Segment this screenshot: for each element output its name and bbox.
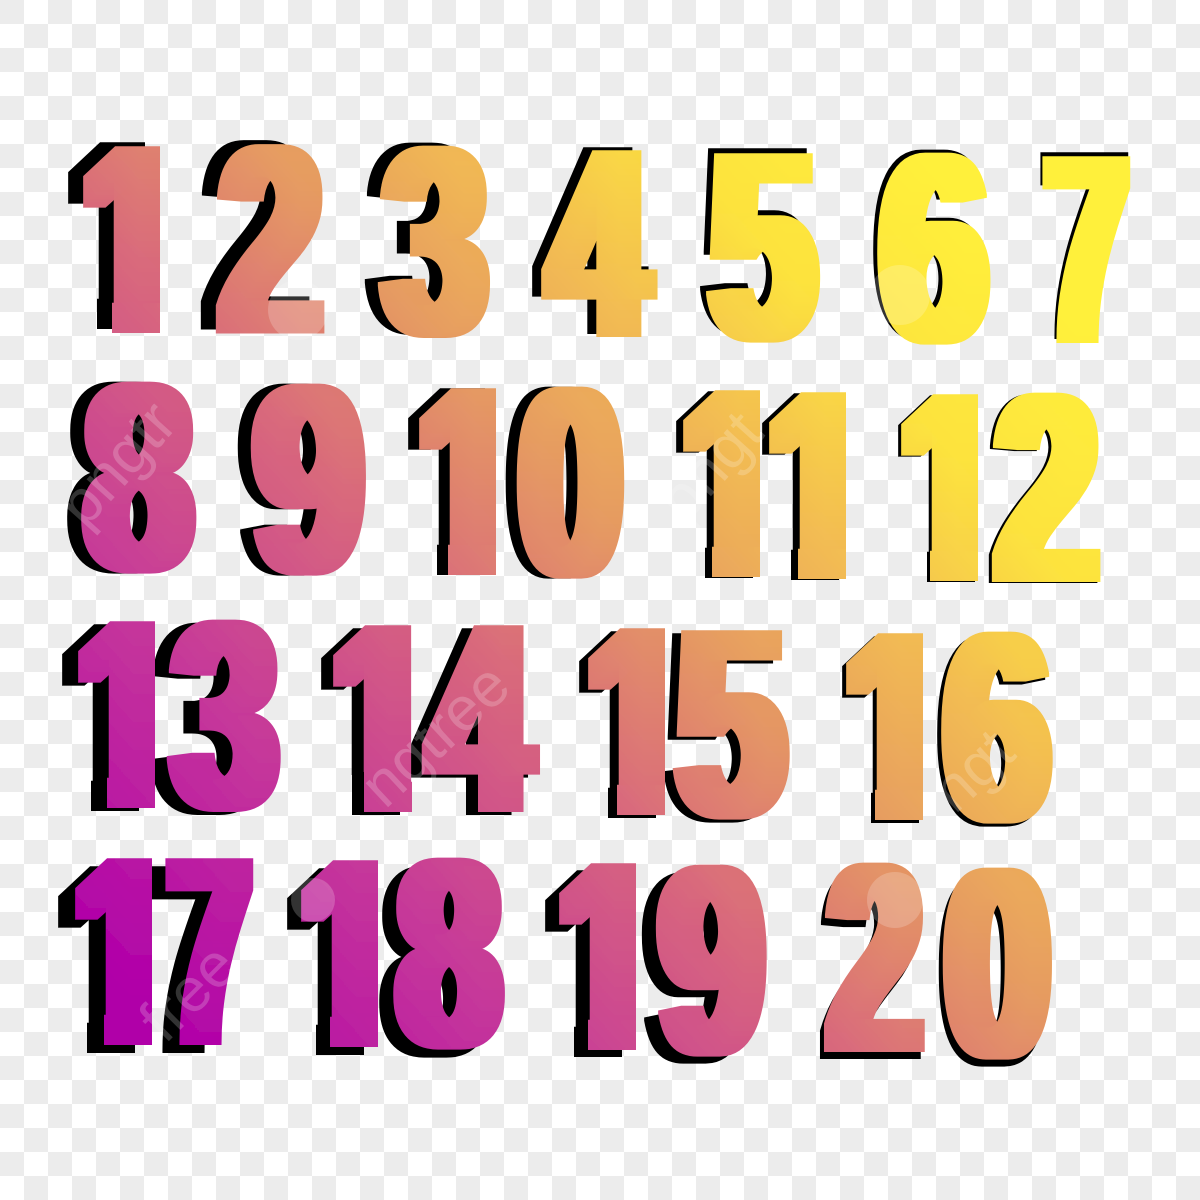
number 2: 2 xyxy=(221,90,321,389)
number 11: 1 xyxy=(682,334,784,632)
number 13: 1 xyxy=(76,564,180,864)
number 15: 5 xyxy=(678,574,784,872)
number 3: 3 xyxy=(385,92,486,390)
number 20: 0 xyxy=(942,820,1044,1120)
number 18: 1 xyxy=(300,804,402,1102)
number 7: 7 xyxy=(1045,96,1123,394)
number 11: 1 xyxy=(760,336,864,636)
number 14: 4 xyxy=(430,568,531,868)
number 12: 2 xyxy=(997,338,1097,638)
number 5: 5 xyxy=(711,96,814,396)
number 20: 2 xyxy=(825,816,916,1114)
number 19: 9 xyxy=(646,818,748,1116)
number 4: 4 xyxy=(540,90,640,390)
number 20 xyxy=(825,808,1048,1120)
number 15: 1 xyxy=(578,574,680,874)
watermark: free xyxy=(126,931,250,1055)
number 7 xyxy=(1045,96,1125,398)
watermark: ngt xyxy=(917,716,1028,825)
number 12 xyxy=(898,392,1100,583)
number 20: 0 xyxy=(946,814,1048,1112)
number 19: 1 xyxy=(558,806,660,1106)
watermark: pngt xyxy=(644,399,776,534)
number 14 xyxy=(321,625,540,815)
number 16: 1 xyxy=(844,576,948,876)
number 7: 7 xyxy=(1047,100,1125,398)
number 11 xyxy=(676,390,846,580)
number 19 xyxy=(545,863,767,1064)
watermark: pngtr xyxy=(44,388,190,539)
number 8: 8 xyxy=(72,328,177,626)
number 19: 1 xyxy=(544,814,646,1112)
number 16: 1 xyxy=(840,580,944,878)
number 14: 4 xyxy=(418,572,519,870)
number 10: 1 xyxy=(418,332,520,630)
number 10: 0 xyxy=(521,332,621,632)
watermark xyxy=(44,265,1028,1055)
number 1: 1 xyxy=(82,90,184,388)
number 17: 1 xyxy=(56,810,160,1108)
number 13: 3 xyxy=(157,568,260,868)
number 5: 5 xyxy=(705,92,808,390)
number 9: 9 xyxy=(255,330,362,628)
number 16: 6 xyxy=(945,578,1048,876)
number 4: 4 xyxy=(550,94,649,392)
number 9: 9 xyxy=(242,330,349,628)
number 14: 1 xyxy=(332,568,434,868)
number 6: 6 xyxy=(877,96,982,394)
number 18: 1 xyxy=(286,812,388,1110)
number 15: 1 xyxy=(586,572,690,870)
number 13: 1 xyxy=(60,568,164,866)
number 11: 1 xyxy=(674,334,778,634)
number 20: 2 xyxy=(829,808,920,1108)
number 10: 1 xyxy=(406,332,510,630)
number 18: 8 xyxy=(398,804,500,1102)
number 6: 6 xyxy=(881,98,986,398)
number 18: 8 xyxy=(384,812,486,1110)
number 1 xyxy=(68,142,160,333)
number 12: 1 xyxy=(896,338,1000,638)
number 15: 5 xyxy=(669,576,775,876)
number 15 xyxy=(579,628,790,823)
number 8: 8 xyxy=(86,328,191,626)
number 17: 7 xyxy=(153,810,231,1108)
number 16 xyxy=(842,632,1053,827)
number 10: 0 xyxy=(510,332,610,632)
number 18 xyxy=(287,858,505,1058)
number 14: 1 xyxy=(320,572,422,870)
number 10 xyxy=(408,386,624,579)
number 12: 1 xyxy=(900,338,1002,636)
number 17 xyxy=(58,858,254,1053)
number 17: 7 xyxy=(170,802,248,1100)
number 1: 1 xyxy=(66,86,170,384)
number 16: 6 xyxy=(941,580,1044,880)
number 12: 2 xyxy=(994,340,1094,638)
number 13: 3 xyxy=(173,566,276,864)
number 13 xyxy=(62,620,281,815)
number 19: 9 xyxy=(660,810,762,1110)
watermark: ngtree xyxy=(347,650,523,820)
number 11: 1 xyxy=(768,336,870,634)
number 17: 1 xyxy=(74,802,176,1100)
number grid xyxy=(58,140,1130,1067)
number 3: 3 xyxy=(372,88,473,388)
number 2: 2 xyxy=(206,86,306,385)
